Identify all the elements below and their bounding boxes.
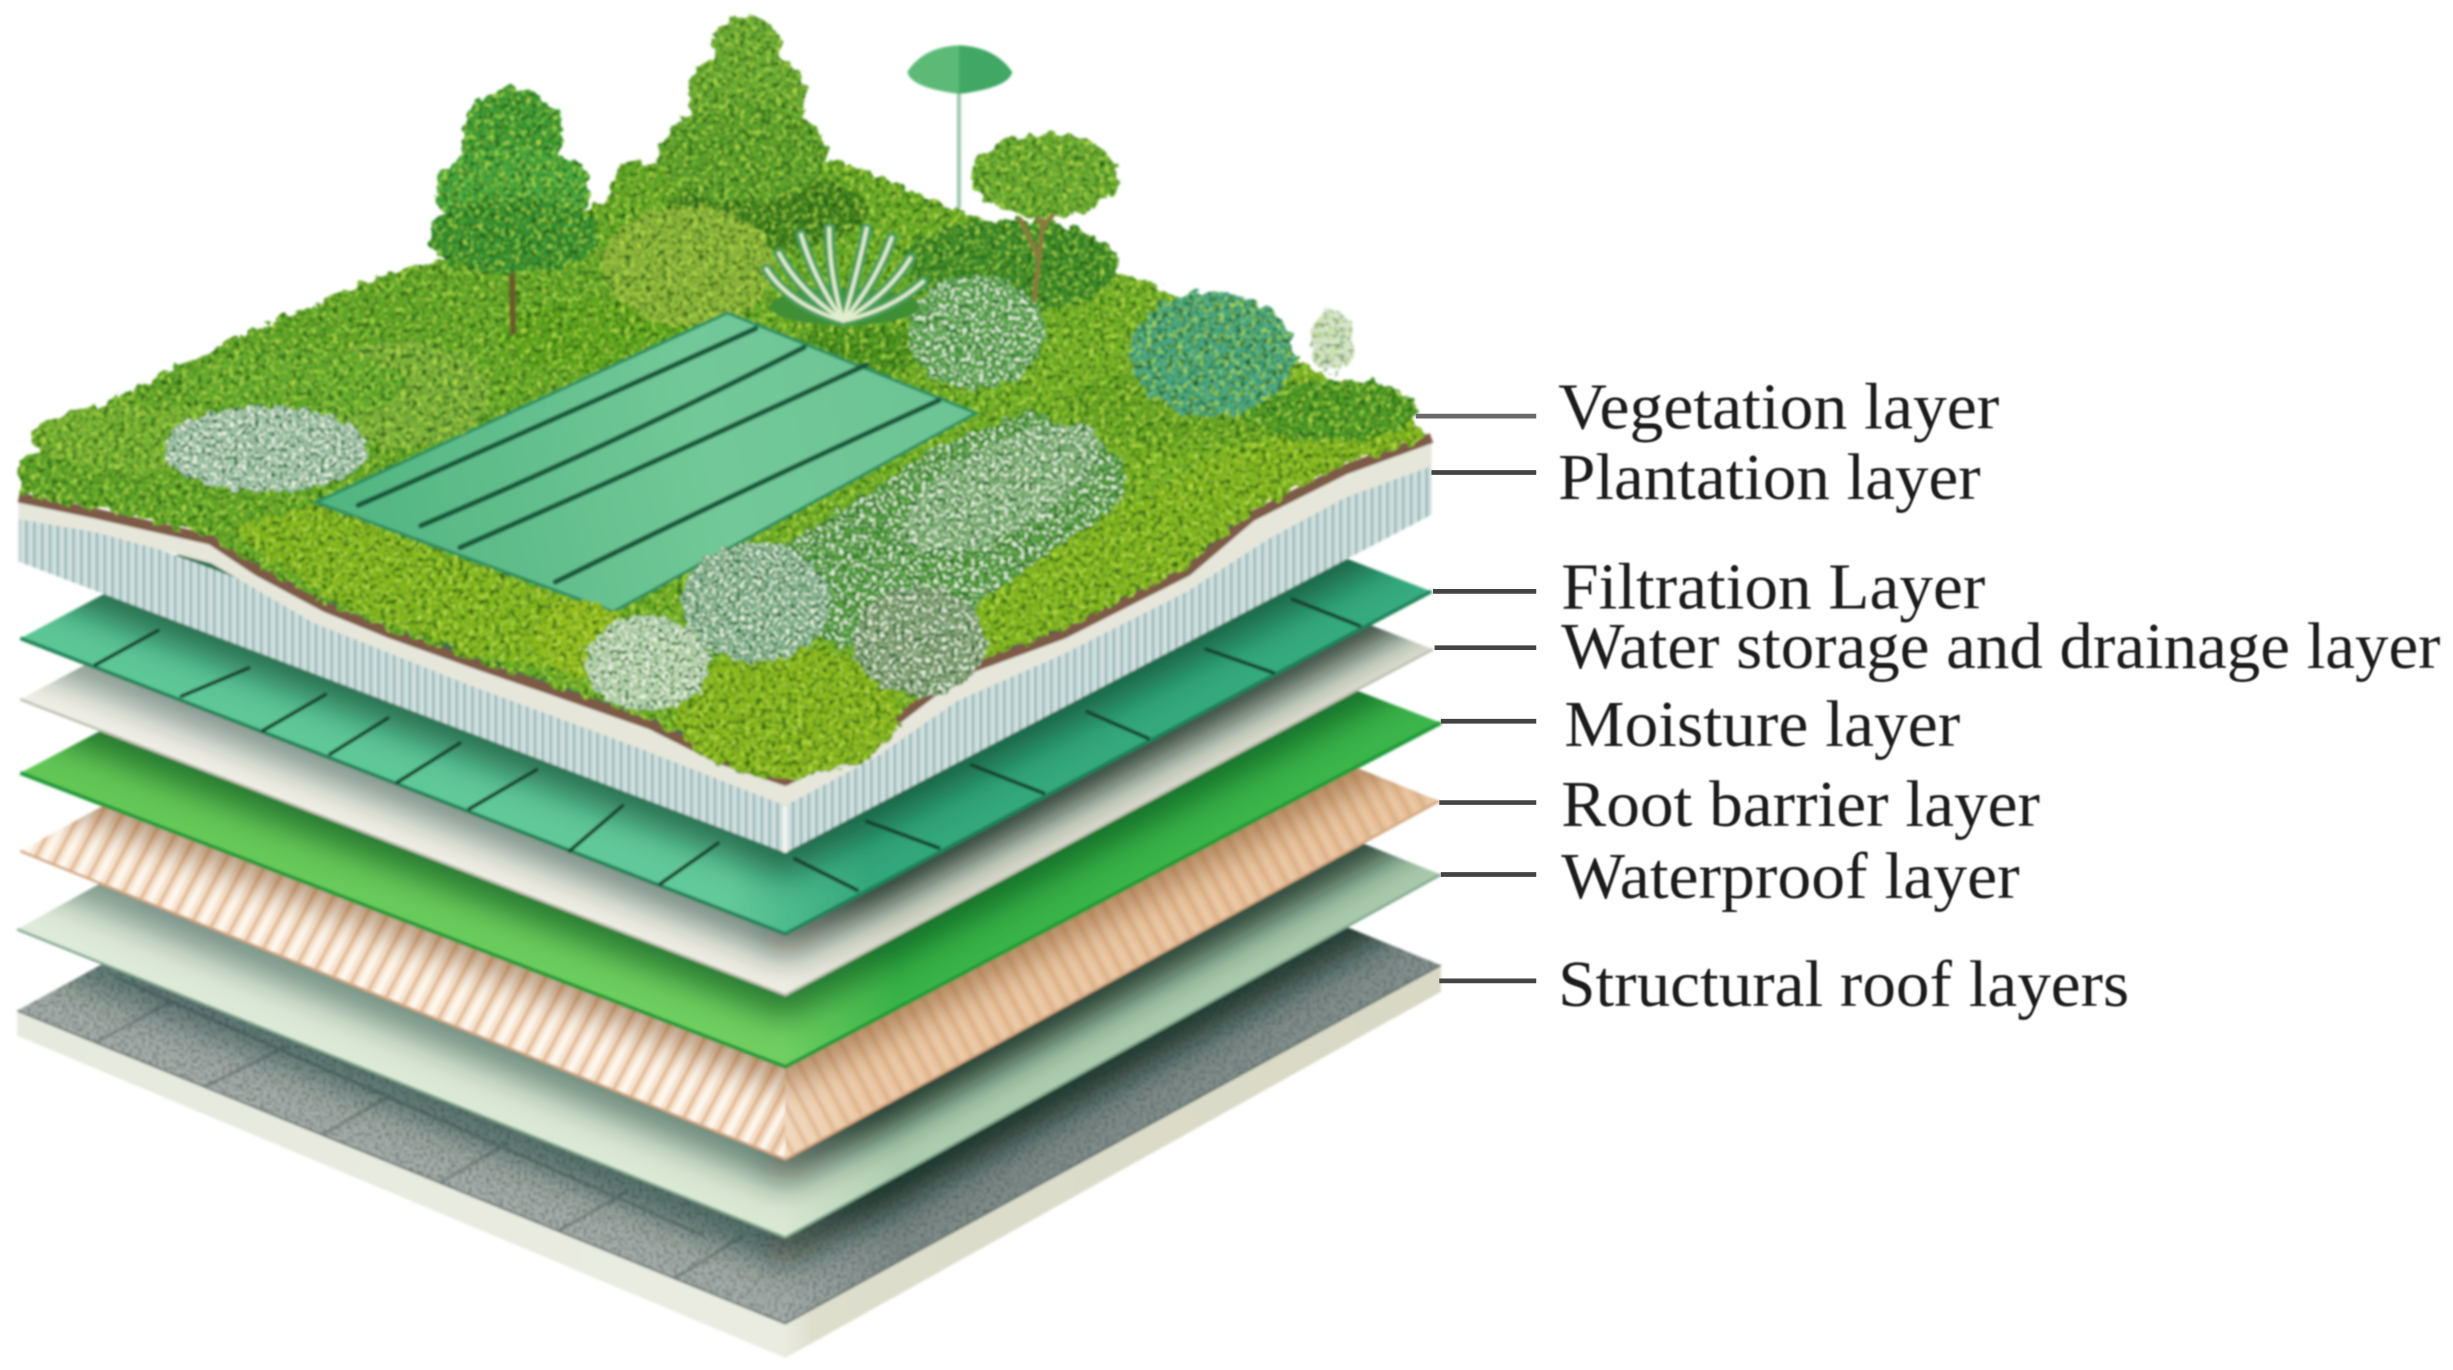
umbrella tree <box>907 45 1012 94</box>
central green drainage mats <box>316 313 976 612</box>
layer: moisture <box>18 690 1444 1070</box>
layer: water storage and drainage <box>19 624 1434 998</box>
layer: waterproof <box>16 842 1442 1240</box>
roof illustration <box>17 16 1441 1358</box>
label: Moisture layer: Moisture layer <box>1564 688 1960 761</box>
label: Vegetation layer: Vegetation layer <box>1558 371 1999 444</box>
label: Waterproof layer: Waterproof layer <box>1561 840 2020 913</box>
teal shrub <box>1131 291 1355 416</box>
hedges and shrubs <box>31 341 1427 778</box>
layer: structural roof <box>16 926 1442 1358</box>
top block: soil and substrate sides <box>19 438 1431 853</box>
dark grass shadows at back <box>501 174 1119 380</box>
label: Structural roof layers: Structural roof layers <box>1558 948 2129 1021</box>
flowering shrubs <box>164 275 1126 710</box>
label: Filtration Layer: Filtration Layer <box>1561 551 1985 624</box>
grass surface <box>19 163 1427 776</box>
layer: filtration <box>18 522 1434 937</box>
label: Water storage and drainage layer: Water storage and drainage layer <box>1561 610 2441 683</box>
trees <box>429 16 1119 274</box>
label: Plantation layer: Plantation layer <box>1558 441 1981 514</box>
tree trunks and umbrella stem <box>512 91 1072 332</box>
label: Root barrier layer: Root barrier layer <box>1561 768 2040 841</box>
layer: root barrier <box>18 766 1440 1162</box>
agave plant <box>767 228 923 325</box>
